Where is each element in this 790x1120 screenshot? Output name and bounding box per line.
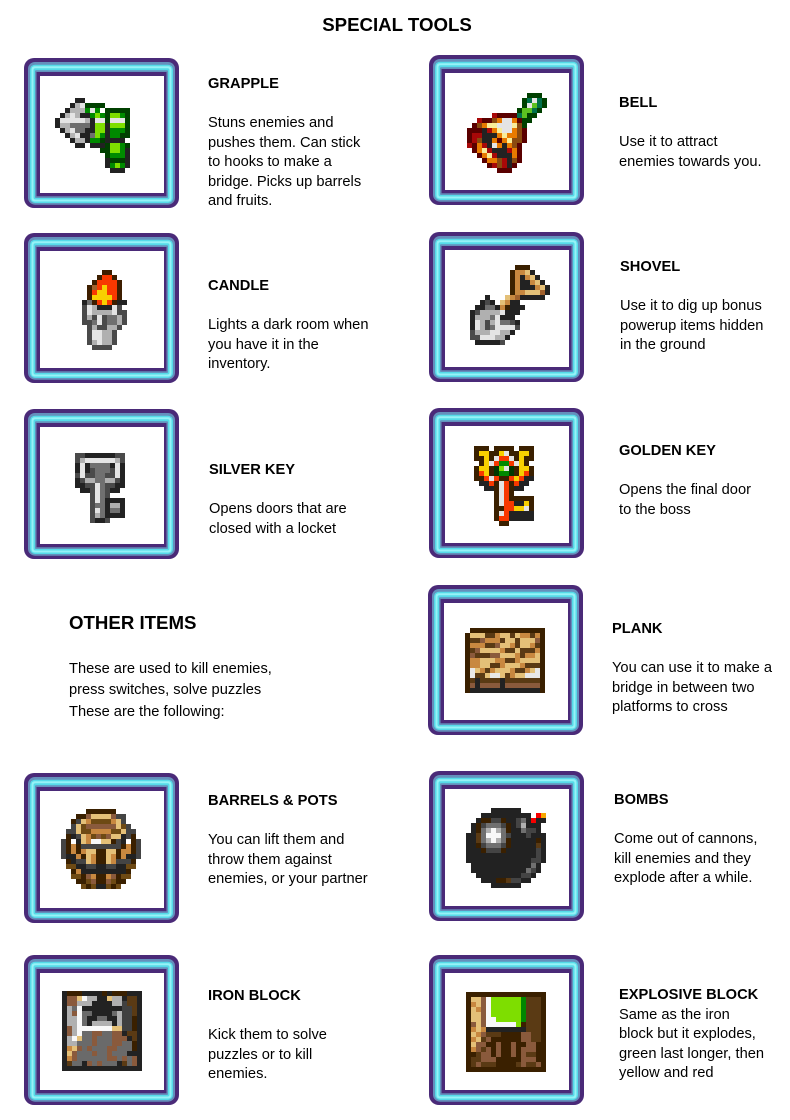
- icon: barrel: [61, 812, 141, 886]
- text: golden key: [619, 443, 751, 518]
- text: grapple: [208, 76, 361, 209]
- frame: [24, 773, 179, 923]
- text: bombs: [614, 792, 757, 886]
- title: SPECIAL TOOLS: [322, 14, 472, 35]
- text: candle: Lights a dark room when: [208, 317, 368, 333]
- text: shovel: powerup items hidden: [620, 318, 763, 334]
- text: explosive block: EXPLOSIVE BLOCK: [619, 987, 758, 1003]
- icon: bomb: [466, 810, 546, 886]
- text: iron block: Kick them to solve: [208, 1027, 327, 1043]
- text: explosive block: block but it explodes,: [619, 1026, 756, 1042]
- panel: silver key: [24, 409, 347, 559]
- text: plank: PLANK: [612, 621, 662, 637]
- text: grapple: bridge. Picks up barrels: [208, 174, 361, 190]
- text: plank: bridge in between two: [612, 680, 755, 696]
- text: golden key: GOLDEN KEY: [619, 443, 716, 459]
- text: silver key: [209, 462, 347, 536]
- panel: plank: [428, 585, 772, 735]
- panel: grapple: [24, 58, 361, 209]
- text: explosive block: [619, 987, 764, 1081]
- icon: iron block: [62, 991, 142, 1071]
- text: explosive block: Same as the iron: [619, 1006, 730, 1022]
- text: barrels and pots: You can lift them and: [208, 832, 344, 848]
- text: grapple: Stuns enemies and: [208, 115, 333, 131]
- text: iron block: puzzles or to kill: [208, 1046, 312, 1062]
- frame: [429, 55, 584, 205]
- icon: bell: [467, 96, 547, 170]
- panel: iron block: [24, 955, 327, 1105]
- panel: other items: [69, 612, 272, 720]
- text: explosive block: yellow and red: [619, 1065, 714, 1081]
- text: iron block: [208, 988, 327, 1082]
- panel: candle: [24, 233, 368, 383]
- text: plank: You can use it to make a: [612, 660, 772, 676]
- frame: [24, 58, 179, 208]
- frame: [429, 771, 584, 921]
- text: other items intro: [69, 660, 272, 720]
- text: explosive block: green last longer, then: [619, 1046, 764, 1062]
- text: bell: Use it to attract: [619, 134, 718, 150]
- icon: grapple: [55, 100, 130, 170]
- text: plank: [612, 621, 772, 715]
- text: silver key: Opens doors that are: [209, 501, 347, 517]
- text: silver key: SILVER KEY: [209, 462, 295, 478]
- text: candle: CANDLE: [208, 278, 269, 294]
- icon: plank: [465, 630, 545, 690]
- panel: bell: [429, 55, 762, 205]
- text: iron block: enemies.: [208, 1066, 267, 1082]
- text: golden key: Opens the final door: [619, 482, 751, 498]
- panel: golden key: [429, 408, 751, 558]
- icon: candle: [82, 272, 127, 348]
- text: bombs: BOMBS: [614, 792, 669, 808]
- text: grapple: GRAPPLE: [208, 76, 279, 92]
- text: golden key: to the boss: [619, 502, 691, 518]
- text: grapple: to hooks to make a: [208, 154, 332, 170]
- text: plank: platforms to cross: [612, 699, 728, 715]
- frame: [24, 233, 179, 383]
- text: barrels and pots: BARRELS & POTS: [208, 793, 337, 809]
- text: bombs: kill enemies and they: [614, 850, 751, 866]
- text: other items intro: These are used to kill enemies,: [69, 660, 272, 676]
- text: barrels and pots: enemies, or your partner: [208, 871, 368, 887]
- text: bombs: explode after a while.: [614, 870, 753, 886]
- text: candle: inventory.: [208, 356, 270, 372]
- panel: explosive block: [429, 955, 764, 1105]
- frame: [429, 955, 584, 1105]
- text: barrels and pots: throw them against: [208, 852, 332, 868]
- frame: [24, 955, 179, 1105]
- text: shovel: in the ground: [620, 337, 706, 353]
- text: candle: [208, 278, 368, 372]
- text: bombs: Come out of cannons,: [614, 831, 757, 847]
- text: silver key: closed with a locket: [209, 520, 336, 536]
- text: iron block: IRON BLOCK: [208, 988, 301, 1004]
- text: bell: enemies towards you.: [619, 154, 762, 170]
- text: barrels and pots: [208, 793, 368, 887]
- text: grapple: pushes them. Can stick: [208, 134, 360, 150]
- panel: shovel: [429, 232, 763, 382]
- icon: silver key: [75, 456, 125, 520]
- frame: [429, 232, 584, 382]
- heading: other items: OTHER ITEMS: [69, 612, 196, 633]
- text: other items intro: These are the following:: [69, 704, 225, 720]
- icon: explosive block: [466, 992, 546, 1072]
- panel: barrels and pots: [24, 773, 368, 923]
- frame: [429, 408, 584, 558]
- text: shovel: SHOVEL: [620, 259, 680, 275]
- text: bell: BELL: [619, 95, 657, 111]
- text: bell: [619, 95, 762, 170]
- text: shovel: [620, 259, 763, 353]
- icon: golden key: [474, 448, 534, 524]
- text: candle: you have it in the: [208, 336, 319, 352]
- frame: [428, 585, 583, 735]
- text: shovel: Use it to dig up bonus: [620, 298, 762, 314]
- text: other items intro: press switches, solve puzzles: [69, 682, 261, 698]
- panel: bombs: [429, 771, 757, 921]
- text: grapple: and fruits.: [208, 193, 272, 209]
- frame: [24, 409, 179, 559]
- icon: shovel: [470, 268, 550, 342]
